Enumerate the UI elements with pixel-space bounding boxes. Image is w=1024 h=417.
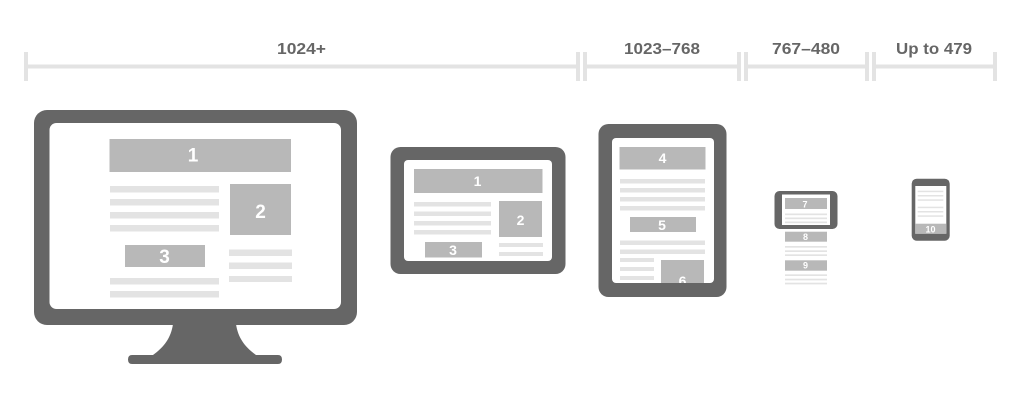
block 9: 9	[803, 260, 808, 270]
breakpoint ruler: 767–480: 767–480	[772, 41, 840, 58]
text lines	[620, 179, 705, 210]
phone body	[774, 191, 838, 229]
block 5: 5	[658, 217, 666, 233]
block 1: 1	[188, 146, 199, 166]
phone screen	[915, 186, 946, 234]
block 6, cropped by the screen edge	[661, 260, 704, 289]
right text lines	[229, 250, 292, 282]
block 5	[630, 217, 696, 233]
text lines	[918, 191, 943, 217]
device: portrait phone	[912, 179, 950, 241]
monitor body	[34, 110, 357, 325]
monitor screen	[50, 123, 341, 309]
overflow text lines	[785, 274, 827, 284]
phone body	[912, 179, 950, 241]
text lines	[414, 202, 491, 234]
device: landscape tablet	[390, 147, 566, 274]
block 2	[499, 201, 542, 237]
device: landscape phone with overflow content	[774, 191, 838, 284]
block 2: 2	[255, 202, 266, 223]
device: desktop monitor	[34, 110, 357, 364]
tablet body	[390, 147, 566, 274]
breakpoint ruler: 1023–768	[583, 41, 741, 81]
block 1	[414, 169, 542, 193]
block 3	[425, 242, 482, 258]
block 10: 10	[925, 224, 936, 234]
block 3: 3	[449, 242, 457, 258]
breakpoint ruler: up to 479	[872, 41, 997, 81]
monitor stand	[128, 324, 282, 364]
block 4	[620, 147, 706, 170]
breakpoint ruler: 1023–768: 1023–768	[624, 41, 700, 58]
text lines	[785, 214, 827, 223]
block 4: 4	[659, 150, 667, 166]
right text lines	[499, 243, 543, 256]
tablet screen	[404, 160, 552, 261]
breakpoint ruler: up to 479: Up to 479	[896, 41, 972, 58]
block 2	[230, 184, 291, 235]
block 6, cropped by the screen edge: 6	[679, 273, 687, 289]
phone screen	[782, 194, 830, 225]
block 2: 2	[517, 212, 525, 228]
block 1: 1	[474, 173, 482, 189]
tablet screen	[612, 138, 714, 283]
breakpoint ruler: 1024+	[24, 41, 580, 81]
text lines	[110, 186, 219, 232]
breakpoint ruler: 767–480	[744, 41, 869, 81]
overflow text lines	[785, 246, 827, 256]
lower text lines	[620, 240, 705, 280]
block 1	[110, 139, 291, 172]
block 3	[125, 245, 205, 268]
lower text lines	[110, 278, 219, 298]
block 8: 8	[803, 232, 808, 242]
block 3: 3	[159, 247, 170, 268]
block 7: 7	[802, 200, 808, 210]
device: portrait tablet	[598, 124, 726, 297]
breakpoint ruler: 1024+: 1024+	[277, 41, 326, 58]
tablet body	[598, 124, 726, 297]
